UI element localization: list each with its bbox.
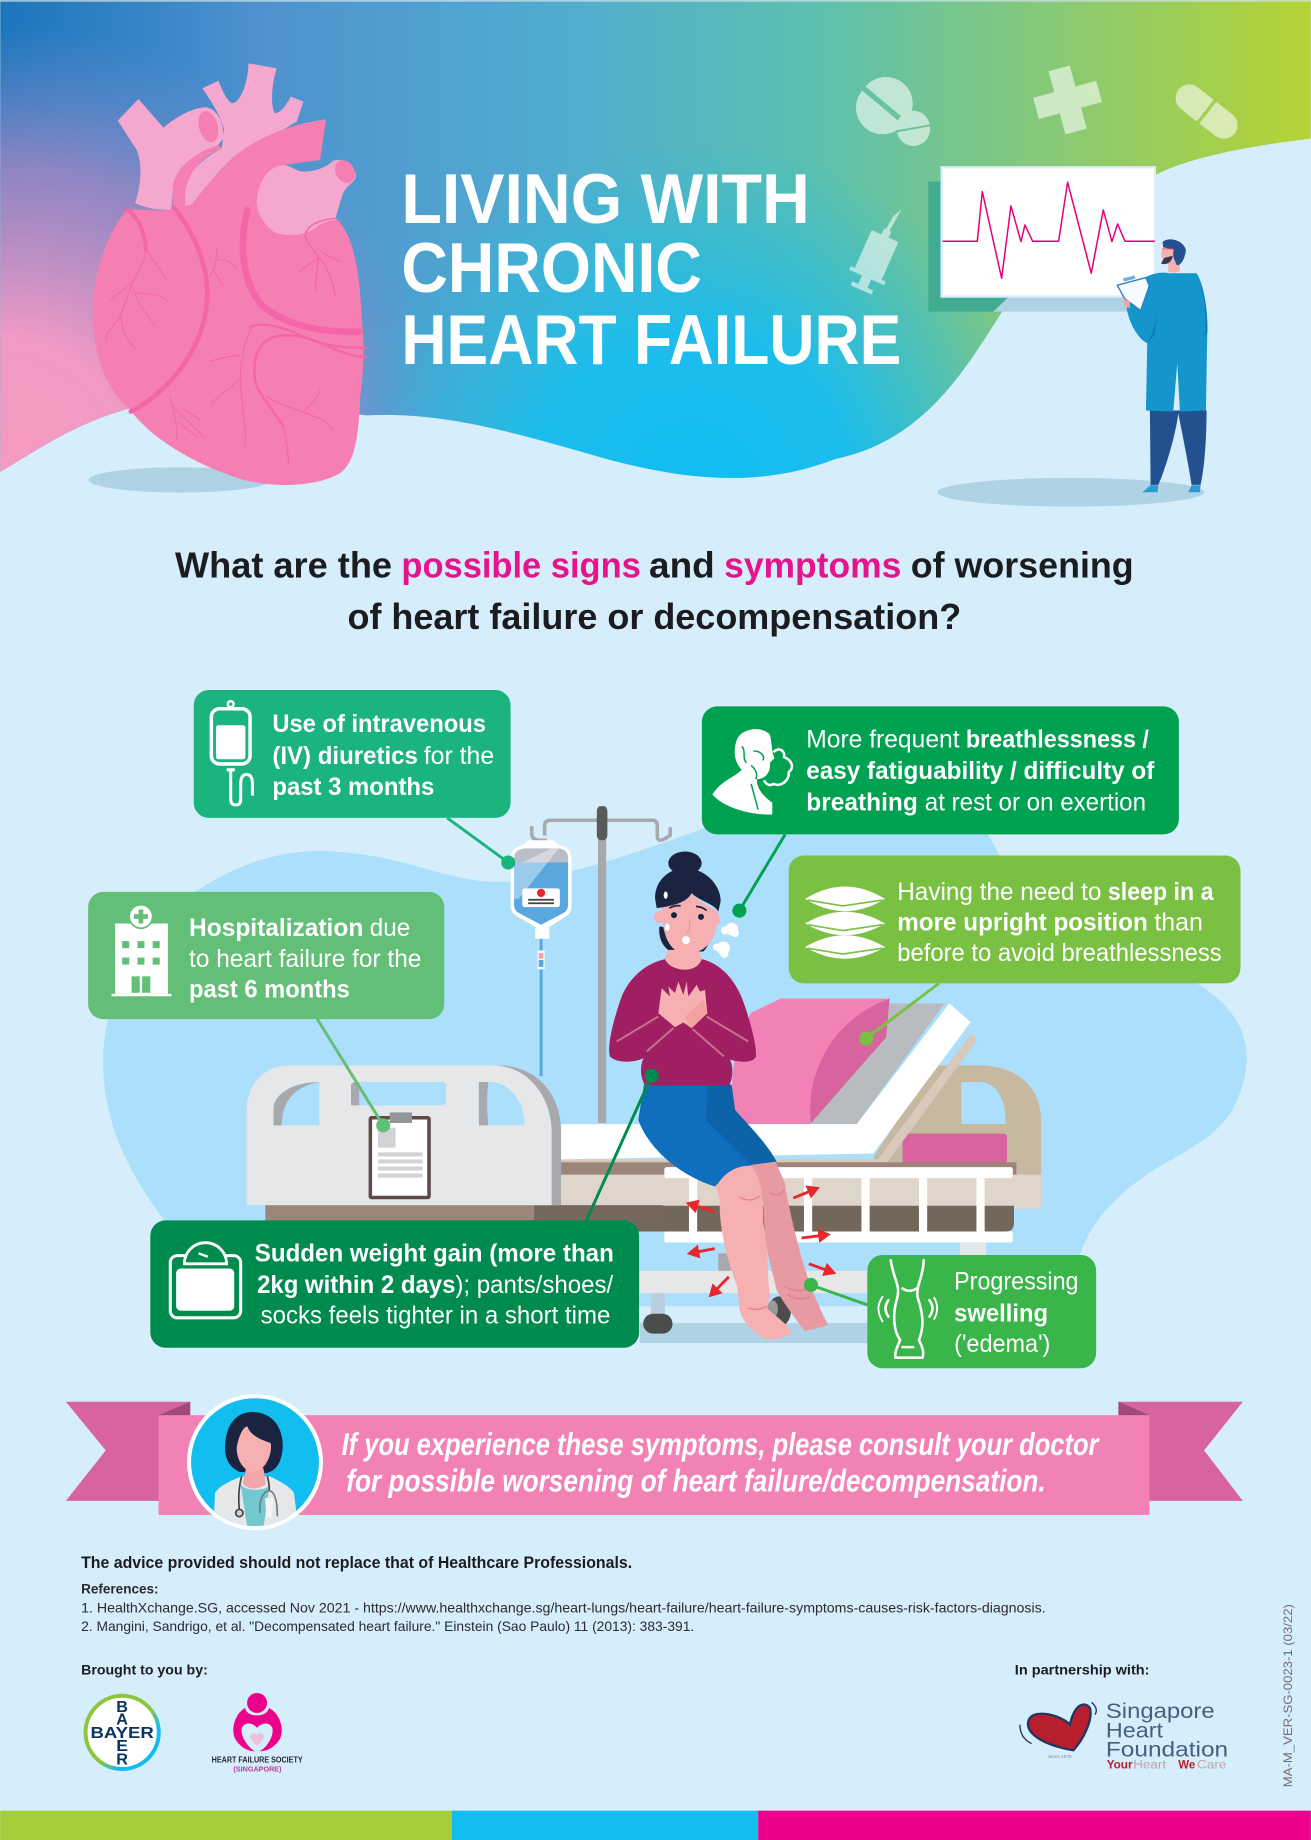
icon: breathless man [712,729,792,815]
society emblem [233,1693,282,1751]
woman upper body [609,852,756,1085]
logo: Singapore Heart Foundation [1020,1700,1228,1771]
upright sleep text: sleep in a [1108,878,1214,906]
title: CHRONIC [401,228,702,307]
foundation tagline: Your [1107,1757,1133,1771]
IV text: past 3 months [272,773,434,801]
back hair [659,927,711,951]
foundation name: Foundation [1106,1738,1228,1761]
banner message: for possible worsening of heart failure/decompensation. [346,1462,1046,1498]
back leg [752,1160,828,1331]
header gradient wave [0,0,1311,493]
upright sleep text [897,878,1222,967]
subheading [175,544,1134,637]
logo: Bayer: BAYER [90,1725,154,1742]
weight text [255,1239,614,1330]
bed strut [718,1253,731,1271]
heart body [93,183,364,485]
panel: sudden weight gain [150,1220,639,1348]
woman lower body [638,1085,828,1339]
rear headboard [874,1066,1041,1209]
ECG line [943,182,1155,278]
panel: upright sleep [789,855,1240,983]
foundation tagline [1107,1757,1227,1771]
headboard cutout [961,1082,1006,1124]
brought to you by label: Brought to you by: [81,1662,208,1678]
bed beige panel [561,1175,1041,1209]
disclaimer: The advice provided should not replace that of Healthcare Professionals. [81,1554,632,1572]
subheading: symptoms [724,544,901,585]
IV tube [540,933,542,1076]
logo: Heart Failure Society [212,1693,303,1773]
pillow [732,999,890,1124]
mattress frame tan [561,1033,976,1169]
panel: swelling [867,1255,1096,1368]
IV drip stand [511,806,670,1123]
subheading: What are the [175,544,392,585]
title: HEART FAILURE [401,300,901,379]
connector: upright sleep [860,983,939,1045]
monitor shadow [928,182,1130,312]
vessel opening [195,109,222,145]
doctor clipboard [1117,276,1149,311]
bed base strip [561,1162,1016,1175]
hospitalization text: past 6 months [189,975,350,1003]
icon: plus [1028,60,1108,140]
weight text: socks feels tighter in a short time [261,1302,610,1330]
bed lower frame [640,1271,894,1293]
references: 2. Mangini, Sandrigo, et al. "Decompensated heart failure." Einstein (Sao Paulo) 11 (2013): 383-391. [81,1618,694,1634]
hospital bed [247,999,1041,1343]
ribbon right tail [1118,1402,1243,1501]
icon: stacked pillows [805,887,885,959]
clipboard [370,1112,429,1198]
footboard [247,1066,561,1205]
banner message: If you experience these symptoms, please consult your doctor [342,1426,1100,1462]
logo: Bayer: A [116,1712,128,1729]
foundation tagline: We [1178,1757,1195,1771]
upright sleep text: more upright position [897,909,1148,937]
swelling text: swelling [954,1299,1048,1327]
references: References: [81,1581,159,1597]
hands on chest [658,981,707,1028]
foundation tagline: Care [1197,1757,1227,1771]
IV text [272,710,494,801]
front wheel [643,1314,673,1334]
foundation name: Heart [1106,1719,1163,1742]
ribbon folds [159,1402,1150,1415]
neck [665,950,702,975]
IV pole [532,806,670,1123]
icon: hospital [112,905,171,996]
monitor with ECG [928,167,1155,312]
doctor shadow [937,478,1204,507]
skirt [638,1085,777,1186]
panel: breathlessness [702,706,1179,834]
IV bag [511,840,572,969]
mattress [561,1003,971,1159]
swelling text [954,1268,1079,1358]
breathlessness text: easy fatiguability / difficulty of [806,757,1155,785]
heart illustration [88,63,366,493]
icon: syringe [844,200,915,298]
breathlessness text: breathing [806,788,918,816]
knee creases [740,1190,809,1309]
front leg [716,1166,792,1339]
references: 1. HealthXchange.SG, accessed Nov 2021 - https://www.healthxchange.sg/heart-lungs/heart-failure/heart-failure-symptoms-causes-risk-factors-diagnosis. [81,1599,1046,1615]
hospitalization text: due [370,914,410,942]
icon: weighing scale [170,1243,241,1318]
connector: hospitalization [317,1019,390,1132]
title [401,159,901,379]
foundation name [1106,1700,1228,1761]
background blob [103,806,1247,1306]
floor shadow [640,1323,892,1343]
doctor coat [1127,273,1207,412]
breathlessness text: breathlessness / [966,725,1149,753]
logo: Bayer: E [116,1738,128,1755]
atrium opening [331,157,359,187]
subheading: of worsening [911,544,1134,585]
decorative medical icons [844,60,1243,298]
ribbon left tail [66,1402,190,1501]
hospitalization text: Hospitalization [189,914,363,942]
upright sleep text: Having the need to [897,878,1101,906]
footboard base [265,1205,663,1222]
title: LIVING WITH [401,159,810,238]
subheading: possible signs [401,544,641,585]
bed pink sheet [903,1134,1007,1164]
weight text: Sudden weight gain (more than [255,1239,614,1267]
doctor with clipboard [937,239,1207,507]
subheading: of heart failure or decompensation? [347,596,961,637]
swelling text: ('edema') [954,1330,1050,1358]
sweater [609,959,756,1085]
IV text: Use of intravenous [272,710,486,738]
doctor shoes [1142,485,1201,492]
monitor screen [942,167,1155,297]
weight text: ); pants/shoes/ [455,1271,613,1299]
left vessel [118,99,223,210]
swelling arrows [692,1190,830,1292]
ribbon body [159,1415,1150,1515]
foundation since: Since 1970 [1048,1754,1072,1759]
head [654,852,721,954]
bed rails [664,1167,1013,1242]
connector: weight [586,1069,658,1220]
foundation tagline: Heart [1133,1757,1167,1771]
right vessel [183,63,303,210]
bed leg [960,1243,986,1256]
breathlessness text [806,725,1155,816]
bed gray backing [810,1003,945,1124]
panel: hospitalization [88,892,444,1019]
breathlessness text: More frequent [806,725,960,753]
footer color bar [0,1811,1311,1840]
references [81,1581,1046,1634]
logo: Bayer: B [116,1699,128,1716]
society name: HEART FAILURE SOCIETY [212,1755,303,1764]
logo: Bayer [86,1696,159,1769]
atrium [257,160,356,235]
coronary arteries [106,207,366,463]
hospitalization text [189,914,421,1003]
partnership label: In partnership with: [1015,1662,1150,1678]
vessel band [173,145,222,215]
doctor head [1161,239,1186,273]
breath puffs [713,923,739,958]
doctor avatar [187,1394,323,1530]
logo: Bayer: R [116,1752,128,1769]
rear wheel [767,1296,791,1326]
weight text: 2kg within 2 days [257,1271,455,1299]
foundation heart [1020,1702,1096,1750]
IV text: for the [424,742,494,770]
banner ribbon [66,1394,1243,1530]
pulmonary trunk [187,119,326,213]
panel: IV diuretics [194,690,511,818]
foundation name: Singapore [1106,1700,1215,1723]
bed dark strip [561,1206,1014,1231]
icon: swollen leg [878,1260,937,1358]
sweater arm lines [617,1016,748,1056]
heart shadow [88,467,272,493]
icon: round tablets [845,66,933,149]
document code: MA-M_VER-SG-0023-1 (03/22) [1282,1604,1295,1787]
doctor trousers [1150,411,1207,485]
upright sleep text: before to avoid breathlessness [897,939,1222,967]
upright sleep text: than [1154,909,1203,937]
connector: IV [447,818,515,869]
subheading: and [649,544,715,585]
connector: swelling [805,1278,867,1305]
icon: capsule [1170,79,1243,144]
connector: breathlessness [733,834,785,917]
society country: (SINGAPORE) [233,1764,282,1773]
banner message [342,1426,1100,1498]
breathlessness text: at rest or on exertion [925,788,1146,816]
wheel stem [651,1293,665,1314]
hospitalization text: to heart failure for the [189,945,421,973]
icon: IV bag [211,701,252,805]
swelling text: Progressing [954,1268,1079,1296]
woman patient [609,852,830,1339]
IV text: (IV) diuretics [272,742,418,770]
